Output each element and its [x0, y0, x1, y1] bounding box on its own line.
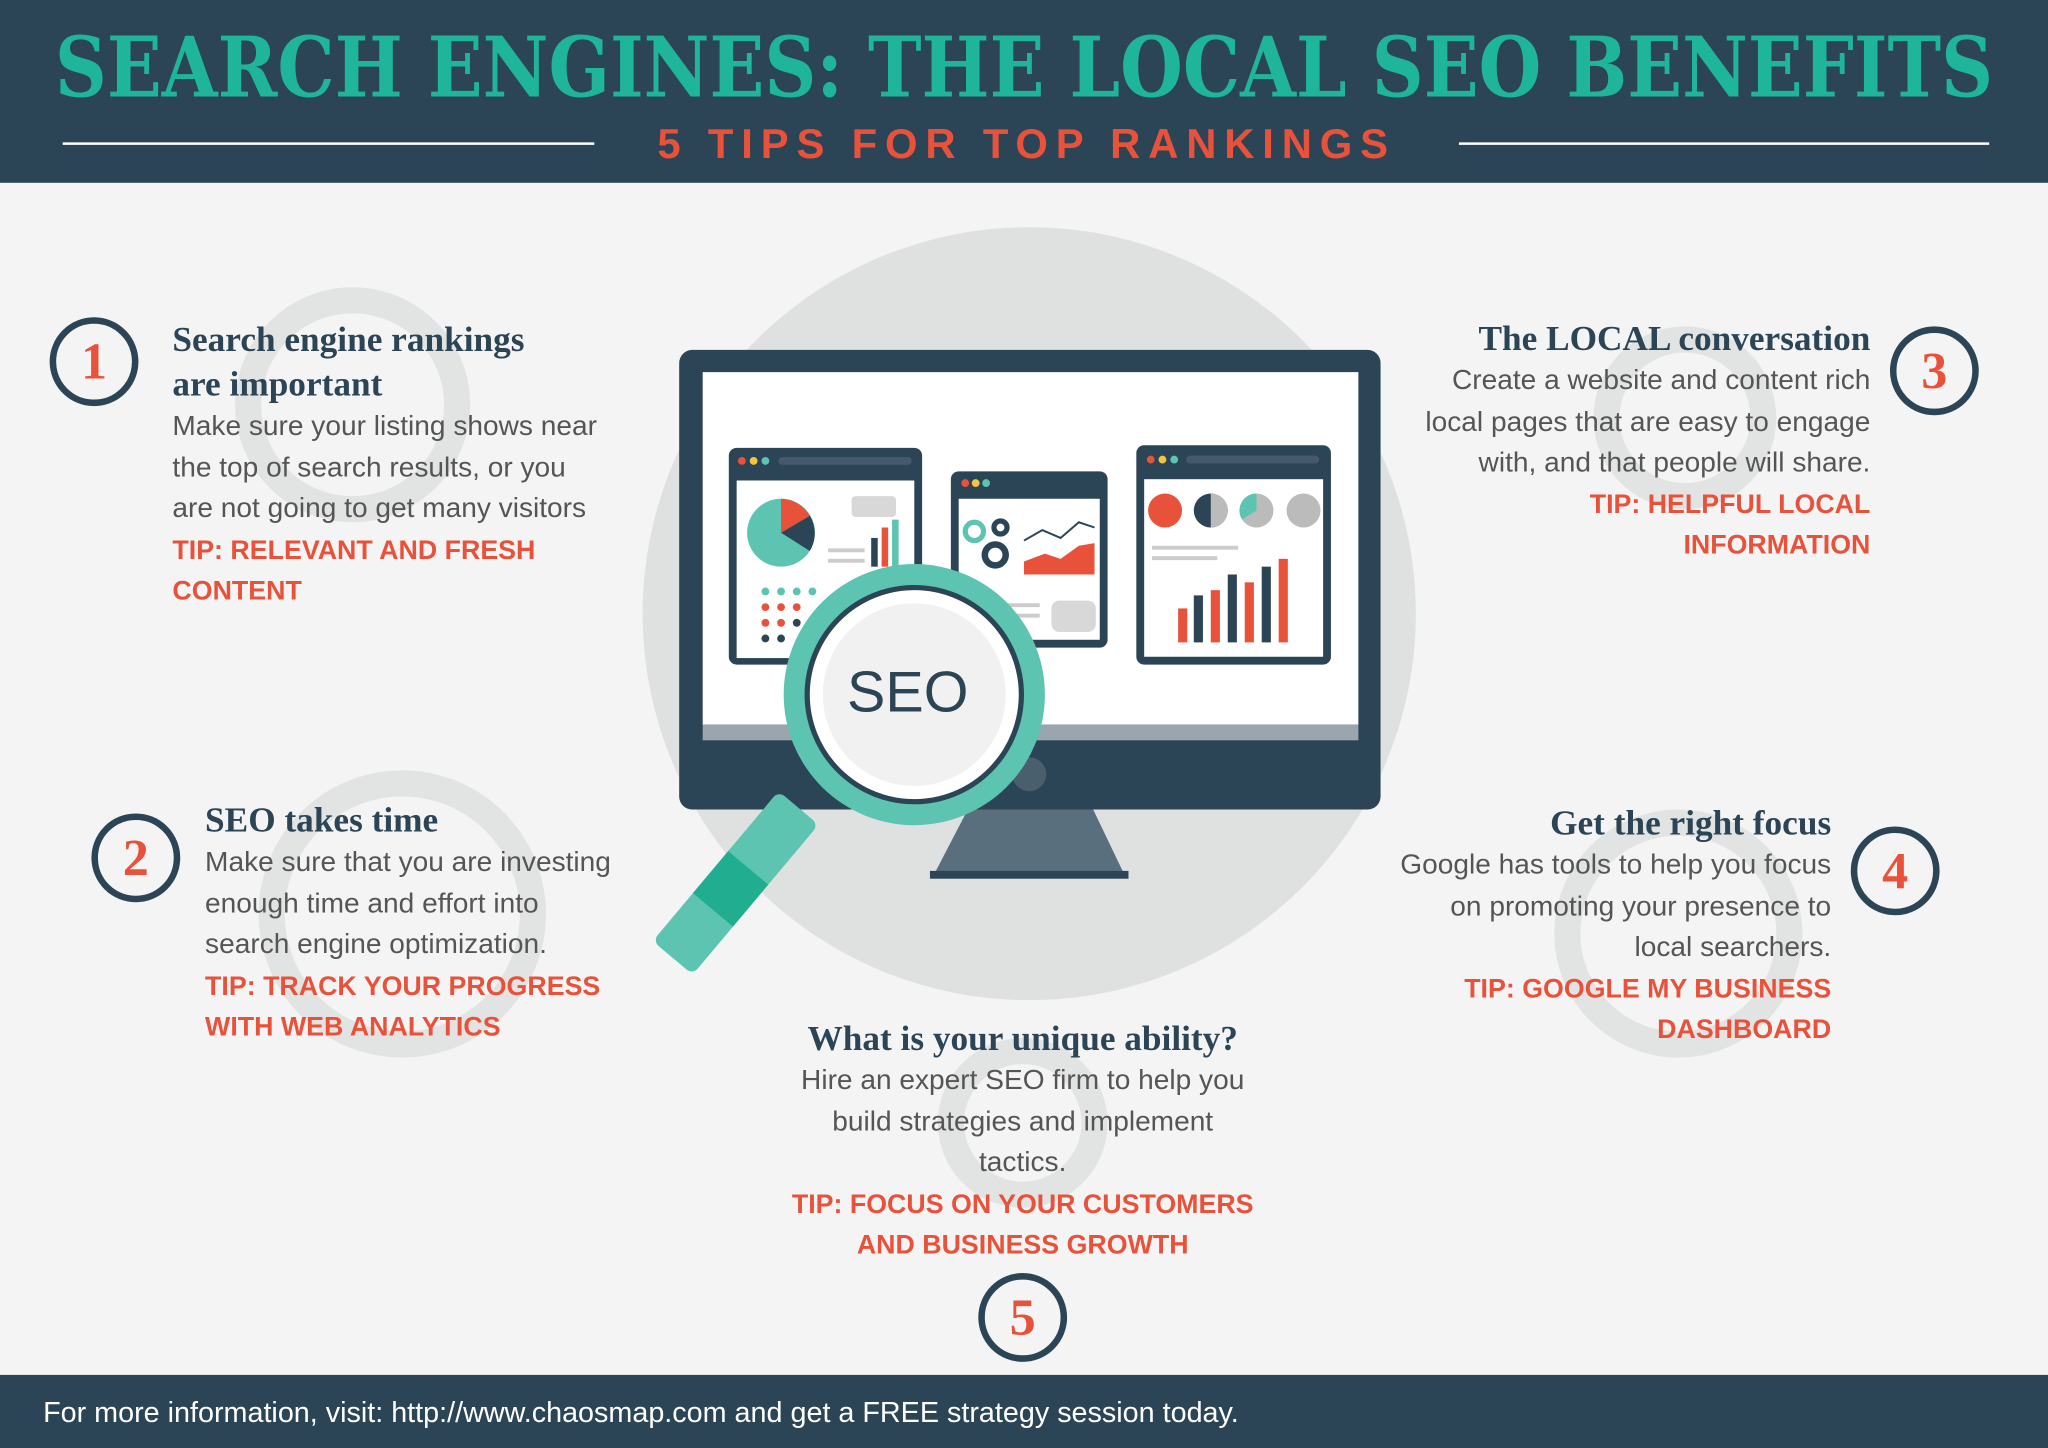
- tip 1: CONTENT: [172, 576, 302, 606]
- tip 1: [50, 317, 597, 606]
- number 2: [91, 813, 180, 902]
- number 1: 1: [81, 332, 107, 390]
- tip 4: Google has tools to help you focus: [1400, 849, 1831, 880]
- tip 5: Hire an expert SEO firm to help you: [801, 1064, 1244, 1095]
- tip 2: [91, 800, 611, 1042]
- tip 4: on promoting your presence to: [1450, 890, 1831, 921]
- number 5: 5: [1010, 1287, 1036, 1346]
- tip 2: search engine optimization.: [205, 928, 547, 960]
- magnifier label: SEO: [847, 661, 968, 725]
- tip 1: the top of search results, or you: [172, 451, 566, 482]
- tip 2: WITH WEB ANALYTICS: [205, 1012, 501, 1042]
- tip 2: enough time and effort into: [205, 887, 539, 919]
- number 1: [50, 317, 138, 406]
- tip 1: TIP: RELEVANT AND FRESH: [172, 535, 535, 565]
- tip 4: DASHBOARD: [1657, 1015, 1831, 1045]
- header bar: [0, 0, 2048, 183]
- tip 5: TIP: FOCUS ON YOUR CUSTOMERS: [792, 1189, 1254, 1219]
- tip 4: Get the right focus: [1550, 803, 1831, 842]
- subtitle: 5 TIPS FOR TOP RANKINGS: [657, 120, 1396, 167]
- faint background icons: [248, 300, 1789, 1195]
- number 3: 3: [1921, 341, 1947, 400]
- tip 3: [1425, 319, 1979, 560]
- footer bar: [0, 1375, 2048, 1448]
- number 4: [1851, 826, 1940, 915]
- tip 5: AND BUSINESS GROWTH: [857, 1230, 1189, 1260]
- tip 3: The LOCAL conversation: [1478, 319, 1870, 358]
- monitor: [653, 350, 1381, 975]
- tip 1: are not going to get many visitors: [172, 492, 586, 524]
- tip 1: Search engine rankings: [172, 320, 524, 359]
- tip 1: are important: [172, 364, 382, 403]
- number 4: 4: [1882, 841, 1908, 900]
- tip 4: [1400, 803, 1940, 1045]
- tip 3: Create a website and content rich: [1452, 364, 1870, 396]
- tip 4: TIP: GOOGLE MY BUSINESS: [1464, 973, 1831, 1003]
- tip 5: build strategies and implement: [832, 1105, 1213, 1137]
- tip 5: What is your unique ability?: [807, 1018, 1238, 1058]
- number 3: [1890, 326, 1979, 415]
- footer text: For more information, visit: http://www.chaosmap.com and get a FREE strategy session today.: [43, 1396, 1239, 1428]
- tip 3: INFORMATION: [1683, 530, 1870, 560]
- tip 1: Make sure your listing shows near: [172, 410, 597, 441]
- tip 3: TIP: HELPFUL LOCAL: [1590, 489, 1870, 519]
- tip 3: local pages that are easy to engage: [1425, 405, 1870, 437]
- number 5: [978, 1273, 1067, 1362]
- tip 4: local searchers.: [1635, 931, 1831, 962]
- tip 5: tactics.: [979, 1146, 1066, 1178]
- tip 2: SEO takes time: [205, 800, 438, 840]
- tip 2: TIP: TRACK YOUR PROGRESS: [205, 971, 600, 1001]
- big circle: [643, 227, 1416, 1000]
- number 2: 2: [123, 828, 149, 887]
- tip 2: Make sure that you are investing: [205, 846, 611, 877]
- tip 5: [792, 1018, 1254, 1362]
- tip 3: with, and that people will share.: [1479, 447, 1870, 478]
